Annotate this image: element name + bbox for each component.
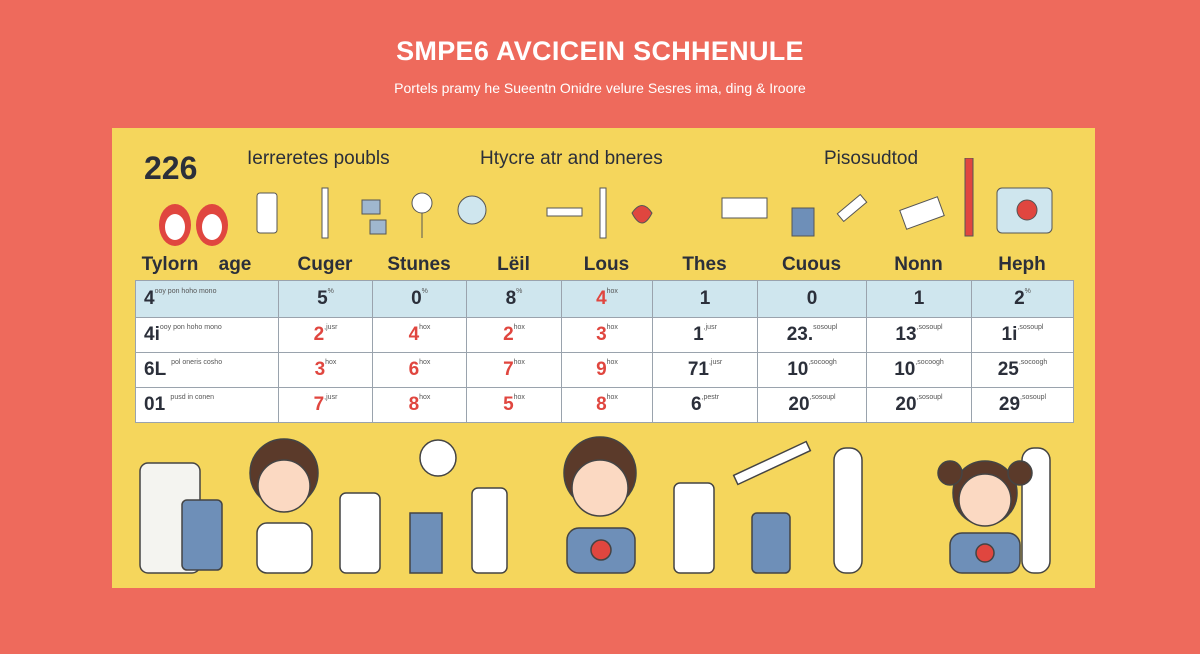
section headings [247,148,918,169]
panel: schedule [112,128,1095,588]
table: 0 [807,288,817,309]
column labels [142,254,1046,275]
table: 29,sosoupl [999,394,1046,415]
table: 5hox [503,394,525,415]
table: 1 [700,288,710,309]
column labels: Cuous [782,254,841,275]
table: 6hox [409,359,430,380]
table: 8hox [596,394,618,415]
table: 8hox [409,394,430,415]
table: 3hox [315,359,336,380]
icons row [159,158,1052,246]
table: 4iooy pon hoho mono [144,324,222,345]
table: 6,pestr [691,394,719,415]
table: 1i,sosoupl [1002,324,1043,345]
big number: 226 [144,150,197,186]
table: 2,jusr [314,324,337,345]
table: 6L pol oneris cosho [144,359,222,380]
table: 1,jusr [693,324,717,345]
table: 7,jusr [314,394,337,415]
table: 4ooy pon hoho mono [144,288,216,309]
table: 2% [1014,288,1031,309]
column labels: Cuger [298,254,352,275]
title: SMPE6 AVCICEIN SCHHENULE [396,36,804,66]
column labels: Lëil [497,254,530,275]
table [135,280,1074,423]
table: 13,sosoupl [895,324,943,345]
table: 10,socoogh [894,359,944,380]
table: 4hox [596,288,618,309]
table: 23.sosoupl [787,324,837,345]
table: 2hox [503,324,525,345]
table: 01 pusd in conen [144,394,214,415]
table: 25,socoogh [998,359,1047,380]
table: 10,socoogh [787,359,837,380]
column labels: Thes [682,254,727,275]
table: 8% [506,288,522,309]
table: 5% [317,288,334,309]
table: 7hox [503,359,525,380]
table: 4hox [409,324,430,345]
column labels: Stunes [387,254,451,275]
column labels: Nonn [894,254,943,275]
section headings: Ierreretes poubls [247,148,390,169]
table: 71,jusr [688,359,722,380]
table: 20,sosoupl [895,394,943,415]
section headings: Htycre atr and bneres [480,148,663,169]
section headings: Pisosudtod [824,148,918,169]
table: 1 [914,288,924,309]
column labels: Lous [584,254,629,275]
table: 0% [411,288,428,309]
table: 3hox [596,324,618,345]
column labels: Heph [998,254,1046,275]
column labels: age [219,254,251,275]
table: 9hox [596,359,618,380]
table: 20,sosoupl [788,394,836,415]
subtitle: Portels pramy he Sueentn Onidre velure Sesres ima, ding & Iroore [394,80,806,96]
column labels: Tylorn [142,254,198,275]
illustrations: kids and bottles [139,436,1051,574]
